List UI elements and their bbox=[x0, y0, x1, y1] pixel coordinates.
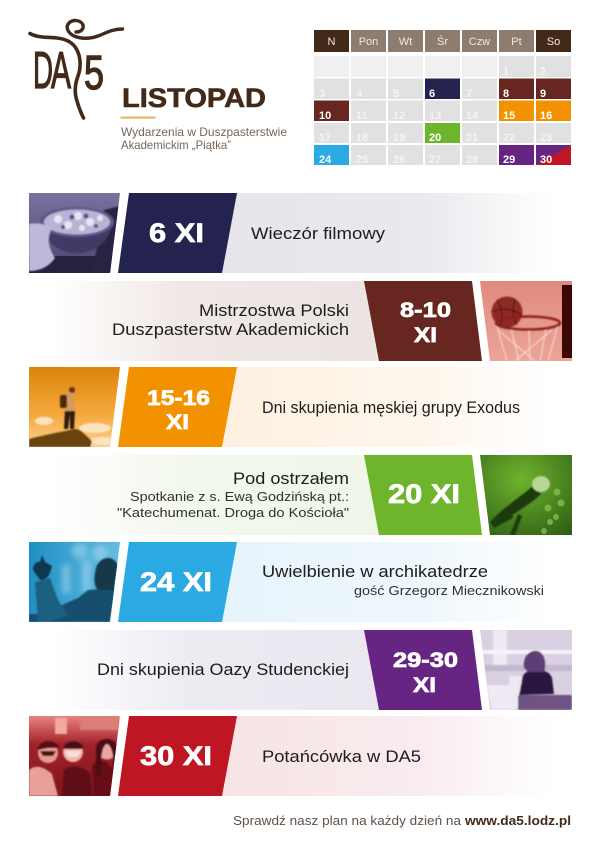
band bbox=[50, 630, 380, 710]
calendar numbers: 1 bbox=[503, 66, 509, 78]
calendar numbers: 27 bbox=[429, 154, 441, 166]
subtitle: Wydarzenia w Duszpasterstwie bbox=[121, 125, 287, 139]
event title: Wieczór filmowy bbox=[251, 224, 386, 243]
date block bbox=[364, 455, 482, 535]
event title bbox=[112, 301, 349, 339]
panel: event 6 XI bbox=[29, 193, 552, 273]
date block: 30 XI bbox=[140, 741, 212, 771]
event title: Duszpasterstw Akademickich bbox=[112, 320, 349, 339]
calendar header: Pon bbox=[359, 36, 378, 48]
calendar numbers: 17 bbox=[319, 132, 331, 144]
calendar header: Pt bbox=[511, 36, 522, 48]
event text: "Katechumenat. Droga do Kościoła" bbox=[117, 505, 349, 520]
calendar numbers: 13 bbox=[429, 110, 441, 122]
calendar header: N bbox=[328, 36, 336, 48]
calendar numbers: 14 bbox=[466, 110, 479, 122]
calendar numbers: 24 bbox=[319, 154, 332, 166]
date block: XI bbox=[414, 324, 437, 347]
event text: Spotkanie z s. Ewą Godzińską pt.: bbox=[130, 489, 349, 504]
photo: basketball hoop bbox=[480, 281, 572, 361]
panel: event 24 XI bbox=[29, 542, 552, 622]
calendar numbers: 16 bbox=[540, 110, 552, 122]
title: LISTOPAD: LISTOPAD bbox=[122, 83, 266, 113]
subtitle: Akademickim „Piątka” bbox=[121, 138, 231, 152]
calendar header: Śr bbox=[437, 35, 448, 48]
footer: www.da5.lodz.pl bbox=[464, 813, 571, 828]
event text bbox=[117, 469, 349, 520]
calendar numbers: 18 bbox=[356, 132, 368, 144]
date block: 20 XI bbox=[388, 479, 460, 509]
event text: Pod ostrzałem bbox=[233, 469, 349, 488]
calendar header bbox=[314, 30, 571, 52]
panel: event 30 XI bbox=[29, 716, 496, 796]
calendar numbers: 20 bbox=[429, 132, 441, 144]
date block bbox=[118, 193, 237, 273]
date block: XI bbox=[166, 411, 189, 434]
logo: DA5 bbox=[30, 21, 122, 118]
calendar header: Wt bbox=[399, 36, 412, 48]
photo: hiker on rock bbox=[29, 367, 121, 447]
calendar header: So bbox=[547, 36, 560, 48]
panel: event 20 XI bbox=[112, 455, 572, 535]
calendar numbers: 26 bbox=[393, 154, 405, 166]
band bbox=[50, 455, 380, 535]
calendar header: Czw bbox=[469, 36, 490, 48]
calendar numbers: 30 bbox=[540, 154, 552, 166]
calendar numbers: 19 bbox=[393, 132, 405, 144]
logo letters bbox=[33, 42, 104, 100]
photo: worship bbox=[29, 542, 121, 622]
date block bbox=[118, 367, 237, 447]
logo letters: D bbox=[33, 42, 53, 100]
panel: event 29-30 XI bbox=[50, 630, 572, 710]
logo letters: A bbox=[51, 42, 71, 100]
calendar numbers: 9 bbox=[540, 88, 546, 100]
footer: Sprawdź nasz plan na każdy dzień na bbox=[233, 813, 462, 828]
band bbox=[222, 193, 552, 273]
event title: Dni skupienia Oazy Studenckiej bbox=[97, 660, 349, 679]
calendar numbers: 10 bbox=[319, 110, 331, 122]
calendar numbers: 5 bbox=[393, 88, 399, 100]
panel: calendar bbox=[314, 30, 571, 166]
calendar numbers: 4 bbox=[356, 88, 363, 100]
date block: 6 XI bbox=[149, 218, 204, 248]
date block bbox=[364, 281, 482, 361]
calendar numbers: 6 bbox=[429, 88, 435, 100]
date block: XI bbox=[413, 674, 436, 697]
calendar cells bbox=[314, 56, 571, 165]
band bbox=[50, 281, 380, 361]
date block: 29-30 bbox=[393, 649, 458, 672]
photo: dance party bbox=[29, 716, 121, 796]
event title: Dni skupienia męskiej grupy Exodus bbox=[262, 398, 520, 417]
date block: 8-10 bbox=[400, 299, 451, 322]
photo: microphone bbox=[480, 455, 572, 535]
date block bbox=[364, 630, 482, 710]
title underline bbox=[120, 116, 156, 119]
calendar numbers: 21 bbox=[466, 132, 478, 144]
photo: popcorn bbox=[29, 193, 121, 273]
date block: 15-16 bbox=[147, 387, 210, 410]
event text: gość Grzegorz Miecznikowski bbox=[354, 583, 544, 598]
calendar numbers: 7 bbox=[466, 88, 472, 100]
calendar numbers: 12 bbox=[393, 110, 405, 122]
event title: Potańcówka w DA5 bbox=[262, 747, 421, 766]
date block: 24 XI bbox=[140, 567, 212, 597]
panel: event 8-10 XI bbox=[50, 281, 572, 361]
event text: Uwielbienie w archikatedrze bbox=[262, 562, 488, 581]
band bbox=[222, 367, 552, 447]
event title: Mistrzostwa Polski bbox=[199, 301, 349, 320]
subtitle bbox=[121, 125, 287, 152]
calendar numbers: 25 bbox=[356, 154, 368, 166]
footer bbox=[233, 813, 571, 828]
logo letters: 5 bbox=[84, 47, 104, 100]
calendar numbers: 29 bbox=[503, 154, 515, 166]
band bbox=[222, 542, 552, 622]
date block bbox=[118, 542, 237, 622]
calendar numbers: 8 bbox=[503, 88, 509, 100]
band bbox=[222, 716, 552, 796]
calendar numbers: 23 bbox=[540, 132, 552, 144]
date block bbox=[118, 716, 237, 796]
panel: event 15-16 XI bbox=[29, 367, 552, 447]
calendar numbers: 15 bbox=[503, 110, 515, 122]
calendar numbers: 28 bbox=[466, 154, 478, 166]
calendar numbers bbox=[319, 66, 552, 166]
logo figure bbox=[30, 21, 122, 118]
calendar numbers: 3 bbox=[319, 88, 325, 100]
calendar numbers: 11 bbox=[356, 110, 368, 122]
calendar numbers: 2 bbox=[540, 66, 546, 78]
calendar numbers: 22 bbox=[503, 132, 515, 144]
photo: woman reading bbox=[480, 630, 572, 710]
event text bbox=[262, 562, 544, 598]
